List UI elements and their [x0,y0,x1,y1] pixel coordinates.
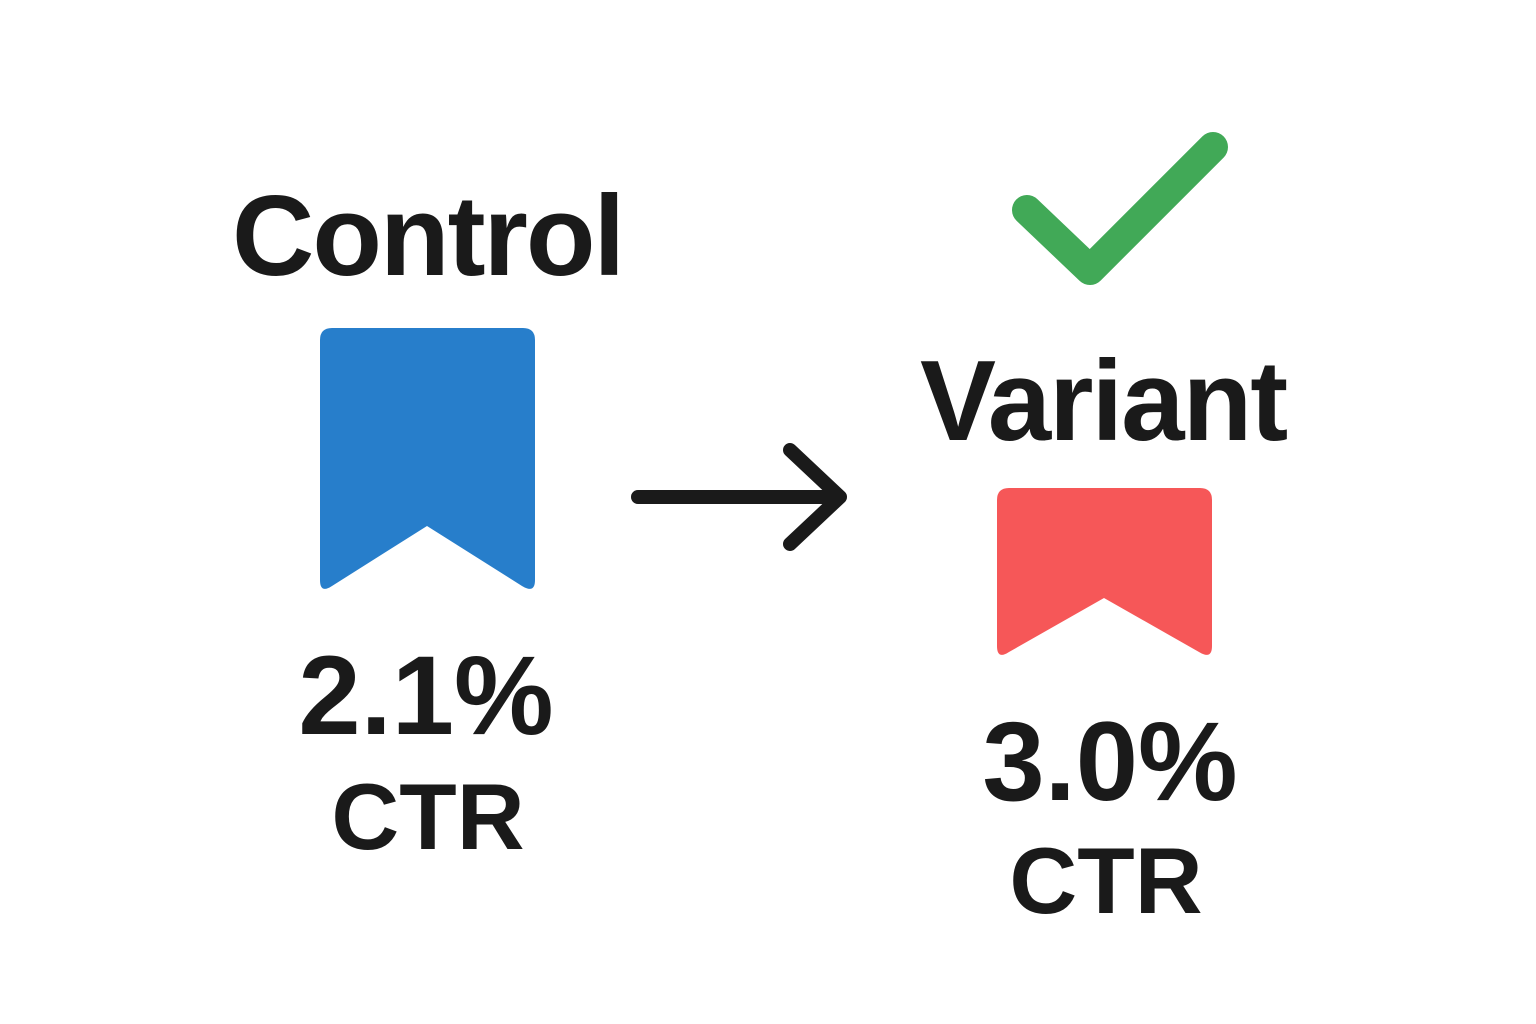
arrow [631,443,847,551]
icon: blue bookmark [320,328,535,589]
icon: green checkmark [1012,132,1228,285]
text: CTR [1009,828,1203,933]
text: CTR [331,764,525,869]
heading: Variant: Variant [920,338,1286,465]
heading: Control: Control [232,173,623,300]
icon: red bookmark [997,488,1212,655]
text: 3.0% CTR: 3.0% [982,699,1238,824]
text: 2.1% CTR: 2.1% [298,633,554,758]
